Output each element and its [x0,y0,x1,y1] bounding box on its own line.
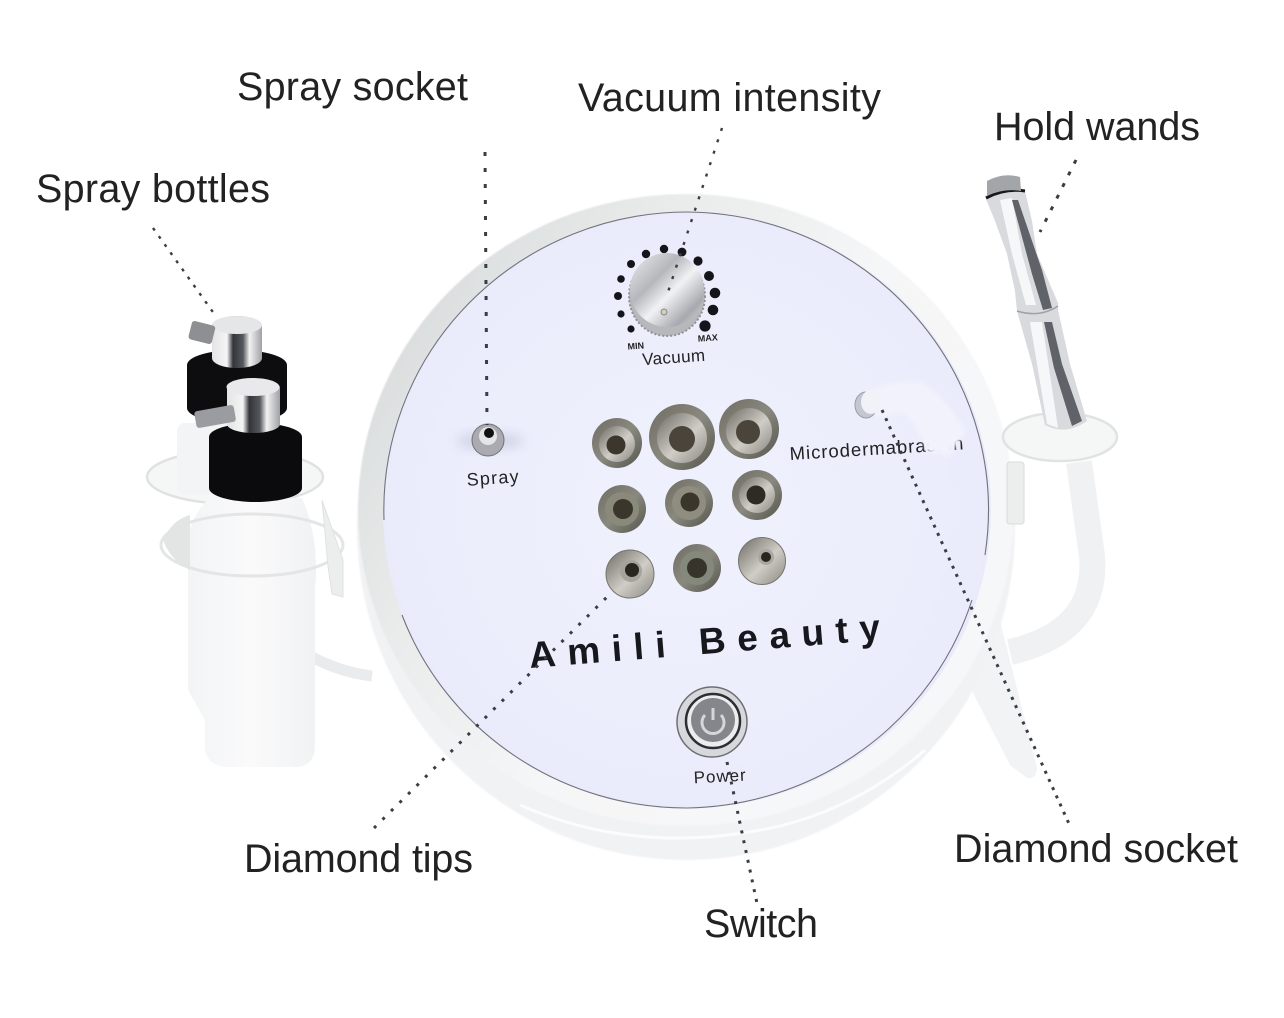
wand holder ring [1003,413,1117,461]
label: Diamond tips: Diamond tips [244,837,473,881]
back cap [187,350,287,423]
socket centre [479,427,497,445]
knob skirt [629,256,705,336]
stand leg [970,621,1037,778]
label: Hold wands: Hold wands [994,105,1200,149]
spray socket [456,424,524,490]
tip 9 [738,538,786,584]
back bottle [177,423,237,495]
button face [691,698,735,742]
MIN label: MIN [627,340,644,352]
leader: switch [727,762,758,908]
knob indicator [661,309,667,315]
leader: hold wands [1040,160,1076,232]
tip 5 [665,479,713,527]
tip 6 [732,470,782,520]
wand highlight [1000,198,1058,428]
tip 1 [592,418,642,468]
panel edge line [384,212,988,808]
body shell [357,194,1015,860]
leader: spray socket [485,152,487,425]
spray bottles assembly [147,316,343,767]
tip 3 [719,399,779,459]
wand thread [987,175,1021,196]
power button [677,687,747,757]
tip 4 [598,485,646,533]
socket rim [855,392,877,418]
back chrome top [212,316,262,334]
socket cap [861,390,881,414]
front chrome top [226,378,280,396]
leader: diamond tips [374,592,612,828]
tip 8 [673,544,721,592]
wand body [986,190,1087,430]
label: Diamond socket: Diamond socket [954,827,1238,871]
inner bezel [686,694,740,748]
front nozzle [194,405,236,428]
tip 7 [606,550,654,598]
hold wand assembly [986,175,1117,524]
diamond socket tube [866,381,966,456]
diamond tips grid [592,399,786,598]
front chrome head [227,379,280,433]
label: Spray bottles: Spray bottles [36,167,270,211]
scale dots [614,245,720,333]
tip 2 [649,404,715,470]
vacuum knob with scale [614,245,720,369]
leader: spray bottles [153,228,215,315]
ring shaded back [163,515,190,570]
wand black ring [986,190,1025,198]
back nozzle [188,320,216,345]
holder clip [322,500,343,597]
label: Spray socket: Spray socket [237,65,468,109]
diamond socket [855,390,881,418]
tube: left bottle hose [312,657,372,676]
hose: right wand hose [1010,462,1092,652]
Vacuum label: Vacuum [642,346,706,369]
back holder ring [147,450,323,504]
label: Switch: Switch [704,902,818,946]
front panel [383,212,991,808]
brand name: Amili Beauty [527,607,882,676]
leader: vacuum intensity [668,128,722,292]
wand ring seam [1017,306,1058,314]
front bottle body [187,498,316,767]
holder clip [1007,462,1024,524]
front cap [209,423,302,502]
button glyph [702,708,724,734]
wand dark stripe [1012,200,1082,426]
socket nut [472,424,504,456]
knob face [630,253,704,327]
Power label: Power [693,766,747,787]
socket hole [484,428,494,438]
leader: diamond socket [882,410,1070,826]
MAX label: MAX [697,332,718,344]
device illustration [147,175,1117,860]
shell highlight seam [520,750,925,838]
microdermabrasion label: Microdermabrasion [789,432,964,464]
front holder ring [161,514,343,576]
back chrome head [212,316,262,368]
socket shadow [456,434,524,448]
outer bezel [677,687,747,757]
Spray label: Spray [466,466,519,490]
label: Vacuum intensity: Vacuum intensity [578,76,881,120]
